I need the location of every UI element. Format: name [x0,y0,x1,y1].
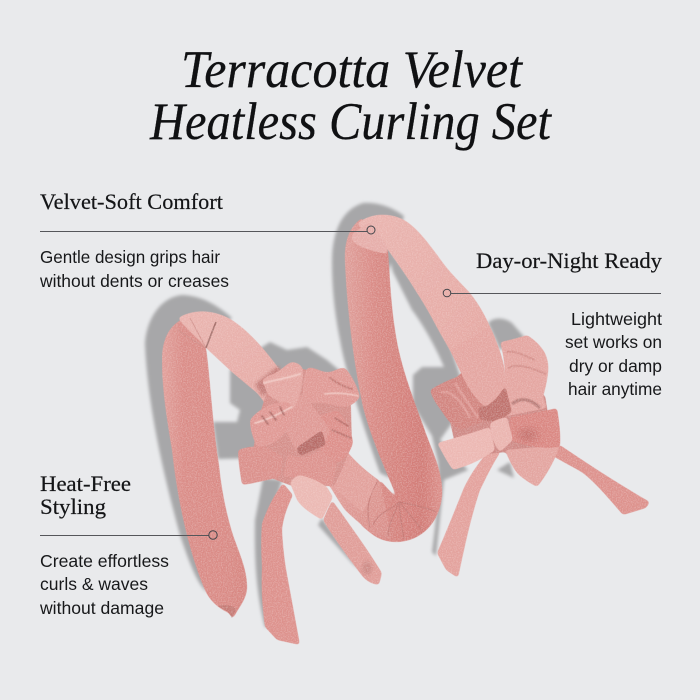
scrunchie backing [250,368,352,486]
scrunchie body [430,327,552,478]
callout: day-or-night ready [443,248,662,399]
rod: left tip shading [218,605,236,618]
callout: heat-free styling [39,471,217,618]
rod: right column and bottom bend [345,218,442,542]
bow: left loop [238,446,283,485]
rod: bend creases [368,481,436,539]
body text: set works on [565,332,662,352]
scrunchie left lobe [430,367,487,430]
leader line [40,531,217,539]
body text [39,247,229,291]
rod: lower connecting segment [285,400,392,540]
rod: top gather [352,222,388,254]
right scrunchie with bow [430,327,650,578]
shadow: right scrunchie top [488,318,525,350]
shadow: left scrunchie [213,342,345,470]
body text: without dents or creases [39,271,229,291]
body text [565,309,662,399]
body text: Lightweight [571,309,662,329]
body text: without damage [39,598,164,618]
title: Terracotta Velvet [181,41,523,99]
bow: light centre piece [290,475,333,520]
scrunchie body [250,362,360,486]
ribbon: right tail [323,500,382,585]
title [149,41,552,151]
scrunchie lobe: left lower [250,402,294,447]
shadow: inside loop [386,245,468,556]
ribbon: right tail [543,445,650,515]
ribbon: long left tail [261,483,300,645]
shadow: left ribbons [255,478,282,627]
heading: Heat-Free [40,471,131,496]
rod: left column [162,316,247,619]
rod: segment leaving scrunchie [333,457,377,513]
scrunchie lobe: right lower [315,410,353,463]
rod: upper right light arc [357,215,505,407]
body text [39,551,169,618]
heading [40,471,131,519]
body text: curls & waves [40,574,148,594]
left scrunchie with bow [238,362,382,645]
heading: Velvet-Soft Comfort [40,189,223,214]
bow: right loop [510,408,560,448]
body text: Create effortless [40,551,169,571]
bow: knot [490,417,513,452]
bow: lower light lobe [505,445,560,487]
callout: velvet-soft comfort [39,189,375,291]
bow: knot and right fold [283,450,337,487]
leader line [443,289,661,297]
scrunchie centre [478,385,512,422]
rod: arc shadow under scrunchie [255,366,290,396]
title: Heatless Curling Set [149,93,552,151]
bow: left loop [437,427,495,470]
scrunchie right lobes [490,335,548,417]
body text: hair anytime [568,379,662,399]
rod: upper left light arc [178,311,320,432]
shadow: left rod [145,295,232,592]
scrunchie folds [255,374,358,438]
rod tip over scrunchie [450,327,505,407]
scrunchie lobe: left upper [262,362,303,412]
body text: dry or damp [569,356,662,376]
scrunchie hole [296,430,326,456]
body text: Gentle design grips hair [40,247,220,267]
heatless curling rod [162,215,505,619]
leader line [40,226,375,234]
product shadows [145,203,525,627]
scrunchie backing [448,388,552,478]
rod: left gather creases [178,318,216,348]
heading: Day-or-Night Ready [476,248,662,273]
scrunchie inner rod band [285,395,330,452]
ribbon: left tail [437,443,500,578]
shadow: right rod [332,203,404,478]
scrunchie lobe: right upper [303,368,360,407]
heading: Styling [40,494,106,519]
